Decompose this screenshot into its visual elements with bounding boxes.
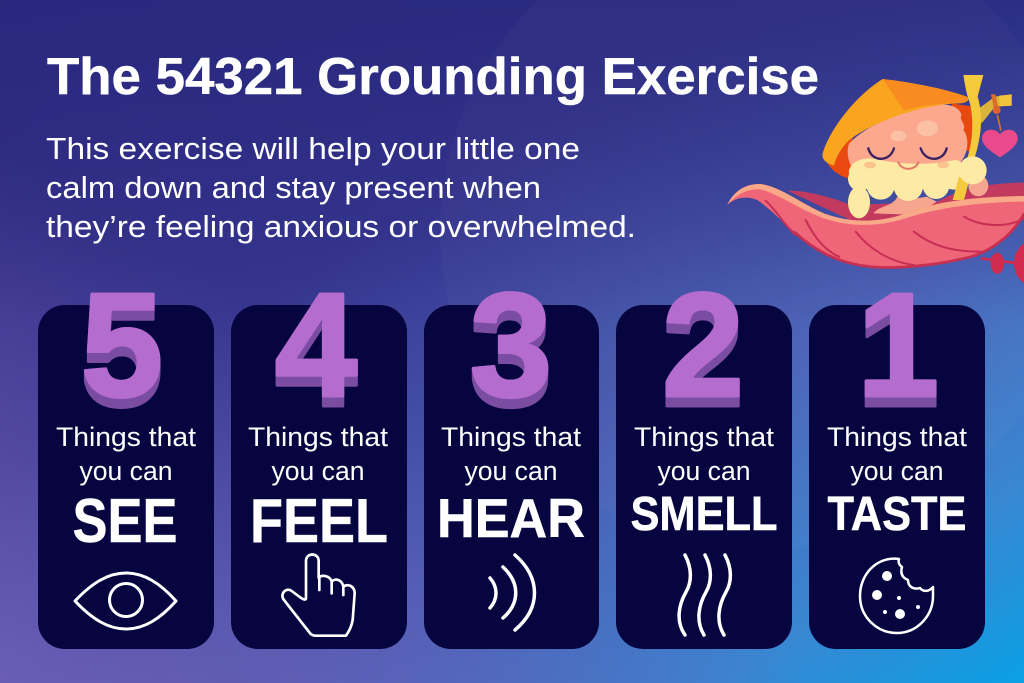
- intro paragraph: This exercise will help your little one: [46, 131, 580, 166]
- card 4: feel: [231, 263, 407, 649]
- card 1: taste: you can: [850, 456, 944, 486]
- number 4: 4: [275, 263, 357, 428]
- icon: cookie: [860, 559, 933, 633]
- icon: sound waves: [490, 555, 534, 630]
- hat: [822, 79, 968, 166]
- intro paragraph: they’re feeling anxious or overwhelmed.: [46, 209, 636, 244]
- other arm: [968, 175, 988, 196]
- icon: smell lines: [679, 555, 730, 635]
- hand: [959, 156, 987, 184]
- number 5: 5: [81, 263, 163, 428]
- card 4: feel: you can: [272, 456, 364, 486]
- card 3: hear: [424, 263, 599, 649]
- smile: [898, 162, 918, 169]
- heart: [982, 130, 1018, 157]
- card 2: smell: [616, 263, 792, 649]
- number 3: 3: [470, 263, 552, 428]
- number 2: 2: [662, 263, 744, 428]
- caption: Things that: [248, 422, 389, 452]
- caption: Things that: [634, 422, 775, 452]
- hat red underside: [826, 138, 853, 179]
- staff: [963, 75, 983, 160]
- caption: Things that: [441, 422, 582, 452]
- intro paragraph: [46, 131, 636, 244]
- legs: [873, 197, 937, 215]
- card 2: smell: you can: [658, 456, 750, 486]
- intro paragraph: calm down and stay present when: [46, 170, 541, 205]
- caption: Things that: [827, 422, 968, 452]
- card 5: see: [38, 263, 214, 649]
- card 1: taste: [809, 263, 985, 649]
- icon: eye: [75, 573, 176, 629]
- hair scallops: [890, 131, 906, 141]
- knot: [991, 94, 999, 109]
- word: smell: SMELL: [630, 488, 778, 541]
- card 3: hear: you can: [464, 456, 558, 486]
- number 1: 1: [857, 263, 939, 428]
- closed eyes: [868, 148, 947, 159]
- beard: [848, 159, 965, 201]
- mascot on leaf boat: [727, 75, 1024, 288]
- lower staff: [953, 177, 969, 200]
- caption: Things that: [56, 422, 197, 452]
- tassel: [981, 258, 1017, 263]
- staff branch: [977, 94, 1012, 123]
- word: hear: HEAR: [437, 487, 585, 549]
- card 5: see: you can: [80, 456, 172, 486]
- title: The 54321 Grounding Exercise: [47, 48, 819, 106]
- word: taste: TASTE: [828, 488, 966, 541]
- leaf front: [727, 184, 1024, 288]
- mascot body: [822, 75, 1018, 218]
- icon: pointing hand: [282, 554, 355, 636]
- head: [848, 105, 967, 170]
- word: see: SEE: [72, 487, 178, 556]
- arm: [848, 186, 870, 218]
- cheeks: [864, 162, 876, 168]
- word: feel: FEEL: [250, 487, 388, 556]
- back of leaf: [787, 183, 1024, 223]
